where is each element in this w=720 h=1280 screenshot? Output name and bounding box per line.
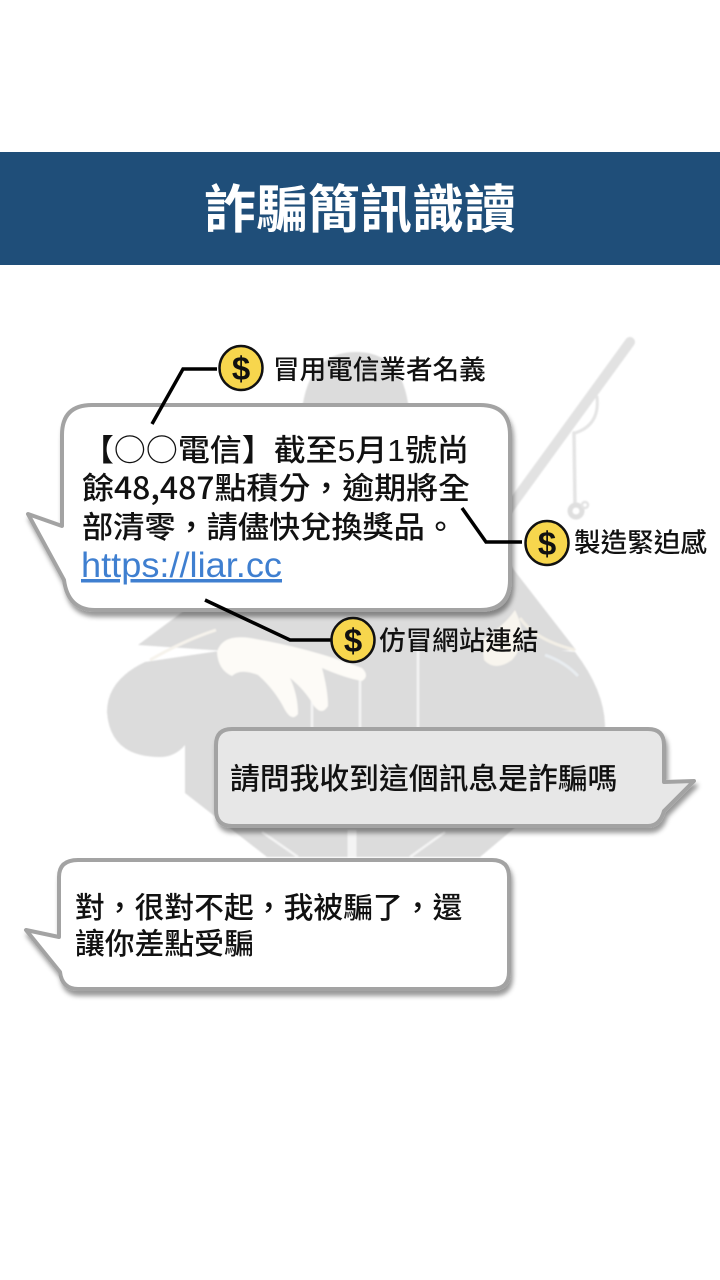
SMS text xyxy=(82,426,470,547)
callout: creating urgency xyxy=(462,508,707,565)
body with lobes xyxy=(107,630,605,857)
callout: impersonating telecom xyxy=(152,346,486,424)
other hand xyxy=(482,610,522,666)
label: 冒用電信業者名義 xyxy=(273,355,486,385)
SMS text: 餘48,487點積分，逾期將全 xyxy=(82,464,470,508)
label: 仿冒網站連結 xyxy=(379,626,539,656)
message bubble: scam SMS xyxy=(28,405,510,610)
link: https://liar.cc xyxy=(81,546,282,585)
reply bubble: apology xyxy=(26,860,509,989)
SMS text: 【○○電信】截至5月1號尚 xyxy=(82,426,469,470)
reply bubble: asking if scam xyxy=(216,729,694,826)
coat lines xyxy=(150,618,578,857)
title: 詐騙簡訊識讀 xyxy=(204,182,516,240)
hat and cape xyxy=(138,352,576,660)
fishing rod xyxy=(508,342,630,517)
callout: fake website link xyxy=(205,600,539,662)
hand xyxy=(217,637,366,717)
question text: 請問我收到這個訊息是詐騙嗎 xyxy=(230,763,617,796)
icon: coin xyxy=(526,521,568,565)
label: 製造緊迫感 xyxy=(574,528,707,558)
header band xyxy=(0,152,720,265)
icon: coin: $ xyxy=(232,350,250,387)
apology text xyxy=(75,883,463,961)
apology text: 讓你差點受騙 xyxy=(75,928,254,961)
icon: coin xyxy=(332,618,374,662)
icon: coin: $ xyxy=(344,622,362,659)
icon: coin: $ xyxy=(538,525,556,562)
background illustration: scammer silhouette with fishing rod xyxy=(107,342,630,857)
icon: coin xyxy=(220,346,262,390)
SMS text: 部清零，請儘快兌換獎品。 xyxy=(82,503,456,547)
apology text: 對，很對不起，我被騙了，還 xyxy=(75,883,463,927)
